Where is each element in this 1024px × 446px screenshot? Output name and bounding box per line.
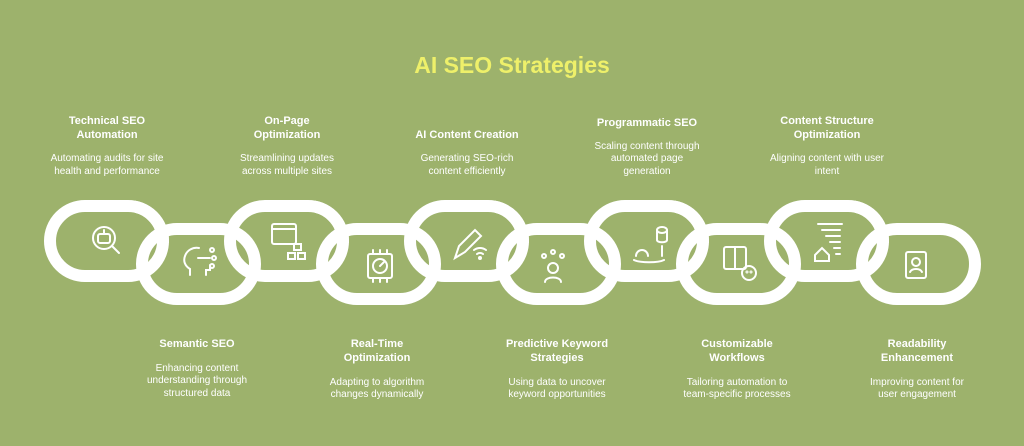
text: Predictive Keyword Strategies: keyword opportunities xyxy=(508,389,606,400)
text: Customizable Workflows: team-specific processes xyxy=(683,389,791,400)
text: Customizable Workflows: Customizable xyxy=(701,338,773,350)
lower links xyxy=(142,229,975,299)
text: AI Content Creation: Generating SEO-rich xyxy=(421,153,513,164)
text: On-Page Optimization: Streamlining updates xyxy=(240,153,334,164)
icon: chip gauge xyxy=(368,250,392,282)
text: Technical SEO Automation: Automation xyxy=(76,129,138,141)
icons xyxy=(93,224,926,282)
text: Programmatic SEO: Programmatic SEO xyxy=(597,117,697,129)
text: AI Content Creation: AI Content Creation xyxy=(415,129,519,141)
text: On-Page Optimization: across multiple sites xyxy=(242,166,332,177)
text: Readability Enhancement: Enhancement xyxy=(881,352,953,364)
text: Semantic SEO: Enhancing content xyxy=(156,363,238,374)
text: Predictive Keyword Strategies: Predictive Keyword xyxy=(506,338,608,350)
text: Real-Time Optimization: Optimization xyxy=(344,352,410,364)
icon: browser sitemap xyxy=(272,224,305,259)
text: On-Page Optimization: On-Page xyxy=(264,115,310,127)
upper links xyxy=(50,206,883,276)
text: On-Page Optimization: Optimization xyxy=(254,129,320,141)
text: Semantic SEO xyxy=(147,338,247,399)
text: Semantic SEO: Semantic SEO xyxy=(159,338,235,350)
text: Predictive Keyword Strategies: Strategies xyxy=(530,352,584,364)
icon: funnel home xyxy=(815,224,842,261)
text: Content Structure Optimization xyxy=(770,115,884,177)
text: Content Structure Optimization: Content Structure xyxy=(780,115,874,127)
text: Readability Enhancement: Improving content for xyxy=(870,377,964,388)
icon: book profile xyxy=(906,252,926,278)
text: Semantic SEO: structured data xyxy=(164,388,230,399)
icon: person ideas xyxy=(542,250,564,282)
text: Technical SEO Automation xyxy=(50,115,163,177)
text: Readability Enhancement: Readability xyxy=(888,338,946,350)
text: Content Structure Optimization: intent xyxy=(815,166,839,177)
text: Technical SEO Automation: Automating audits for site xyxy=(51,153,163,164)
icon: puzzle face xyxy=(724,247,756,280)
text: Programmatic SEO: automated page xyxy=(611,153,683,164)
title: AI SEO Strategies xyxy=(414,52,610,78)
icon: gears database xyxy=(634,227,667,262)
text: Readability Enhancement: user engagement xyxy=(878,389,956,400)
text: AI Content Creation xyxy=(415,129,519,177)
text: Programmatic SEO xyxy=(594,117,700,177)
text: Real-Time Optimization: Real-Time xyxy=(351,338,403,350)
icon: head network xyxy=(184,248,216,275)
chain xyxy=(44,200,981,305)
text: AI Content Creation: content efficiently xyxy=(428,166,506,177)
text: Programmatic SEO: Scaling content through xyxy=(594,141,700,152)
icon: pen wifi xyxy=(455,230,486,259)
icon: robot search xyxy=(93,227,119,253)
text: Readability Enhancement xyxy=(870,338,964,400)
text: Technical SEO Automation: health and performance xyxy=(54,166,160,177)
text: Customizable Workflows: Workflows xyxy=(709,352,765,364)
text: Customizable Workflows: Tailoring automation to xyxy=(687,377,787,388)
text: On-Page Optimization xyxy=(240,115,334,177)
text: Predictive Keyword Strategies: Using data to uncover xyxy=(508,377,606,388)
text: Customizable Workflows xyxy=(683,338,791,400)
text: Real-Time Optimization: Adapting to algorithm xyxy=(330,377,424,388)
text: Programmatic SEO: generation xyxy=(623,166,671,177)
text: Predictive Keyword Strategies xyxy=(506,338,608,400)
text: Real-Time Optimization xyxy=(330,338,424,400)
text: Real-Time Optimization: changes dynamically xyxy=(331,389,423,400)
text: Content Structure Optimization: Optimization xyxy=(794,129,860,141)
interlock overlaps xyxy=(135,200,889,243)
text: Technical SEO Automation: Technical SEO xyxy=(69,115,145,127)
text: Semantic SEO: understanding through xyxy=(147,375,247,386)
text: Content Structure Optimization: Aligning content with user xyxy=(770,153,884,164)
